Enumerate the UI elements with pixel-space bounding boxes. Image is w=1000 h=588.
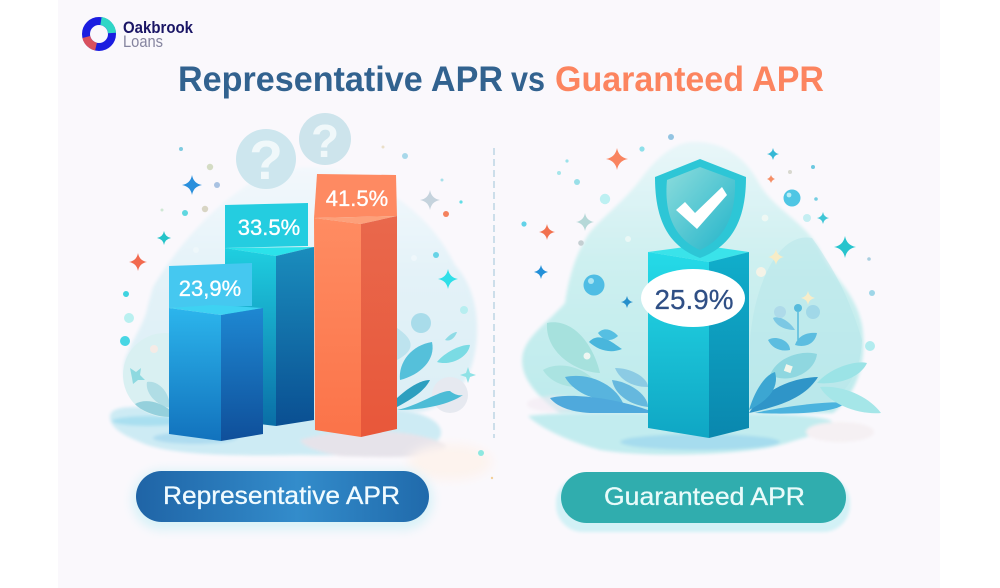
- icon: logo ring: [86, 21, 112, 47]
- bubble: large question mark: ?: [249, 129, 283, 191]
- logo wordmark: Loans: [123, 33, 163, 51]
- sparkles and dots left: [120, 146, 493, 479]
- bar: 23,9%: [169, 263, 263, 441]
- background blob left: [124, 167, 477, 412]
- pill: Guaranteed APR: Guaranteed APR: [604, 483, 805, 511]
- pill: Guaranteed APR: [556, 472, 850, 532]
- foliage left: [123, 333, 207, 417]
- background blob right: [522, 142, 863, 413]
- ground splash left: [110, 407, 492, 480]
- value badge 25.9%: 25.9%: [654, 284, 734, 315]
- logo wordmark: [123, 19, 194, 51]
- bar: 33.5%: [225, 203, 314, 426]
- bar: 33.5%: 33.5%: [238, 215, 300, 240]
- question bubbles: [236, 113, 351, 191]
- bar: 23,9%: 23,9%: [179, 276, 241, 301]
- panel: representative APR illustration: [110, 113, 493, 480]
- foliage right: [397, 306, 476, 413]
- title: Representative APR: [178, 60, 503, 99]
- pill: Representative APR: [132, 470, 433, 530]
- bar: 41.5%: [314, 174, 397, 437]
- foliage left of column: [543, 322, 648, 413]
- title: vs: [511, 60, 545, 99]
- divider: [493, 148, 495, 438]
- label tab 41.5%: [314, 174, 397, 218]
- column: guaranteed APR: [648, 245, 749, 438]
- label tab 33.5%: [225, 203, 308, 248]
- bar: 41.5%: 41.5%: [326, 186, 388, 211]
- foliage right of column: [749, 304, 881, 414]
- label tab 23,9%: [169, 263, 252, 308]
- title: Guaranteed APR: [555, 60, 824, 99]
- icon: shield with check: [655, 159, 746, 258]
- logo: Oakbrook Loans: [86, 19, 194, 51]
- value badge 25.9%: [641, 269, 745, 327]
- bubble: small question mark: ?: [311, 115, 339, 167]
- panel: guaranteed APR illustration: [521, 134, 881, 455]
- logo wordmark: Oakbrook: [123, 19, 194, 37]
- inner hills right: [750, 237, 862, 413]
- sparkles and dots right: [521, 134, 875, 308]
- pill: Representative APR: Representative APR: [163, 482, 400, 510]
- title: [178, 60, 824, 99]
- ground splash right: [527, 396, 874, 455]
